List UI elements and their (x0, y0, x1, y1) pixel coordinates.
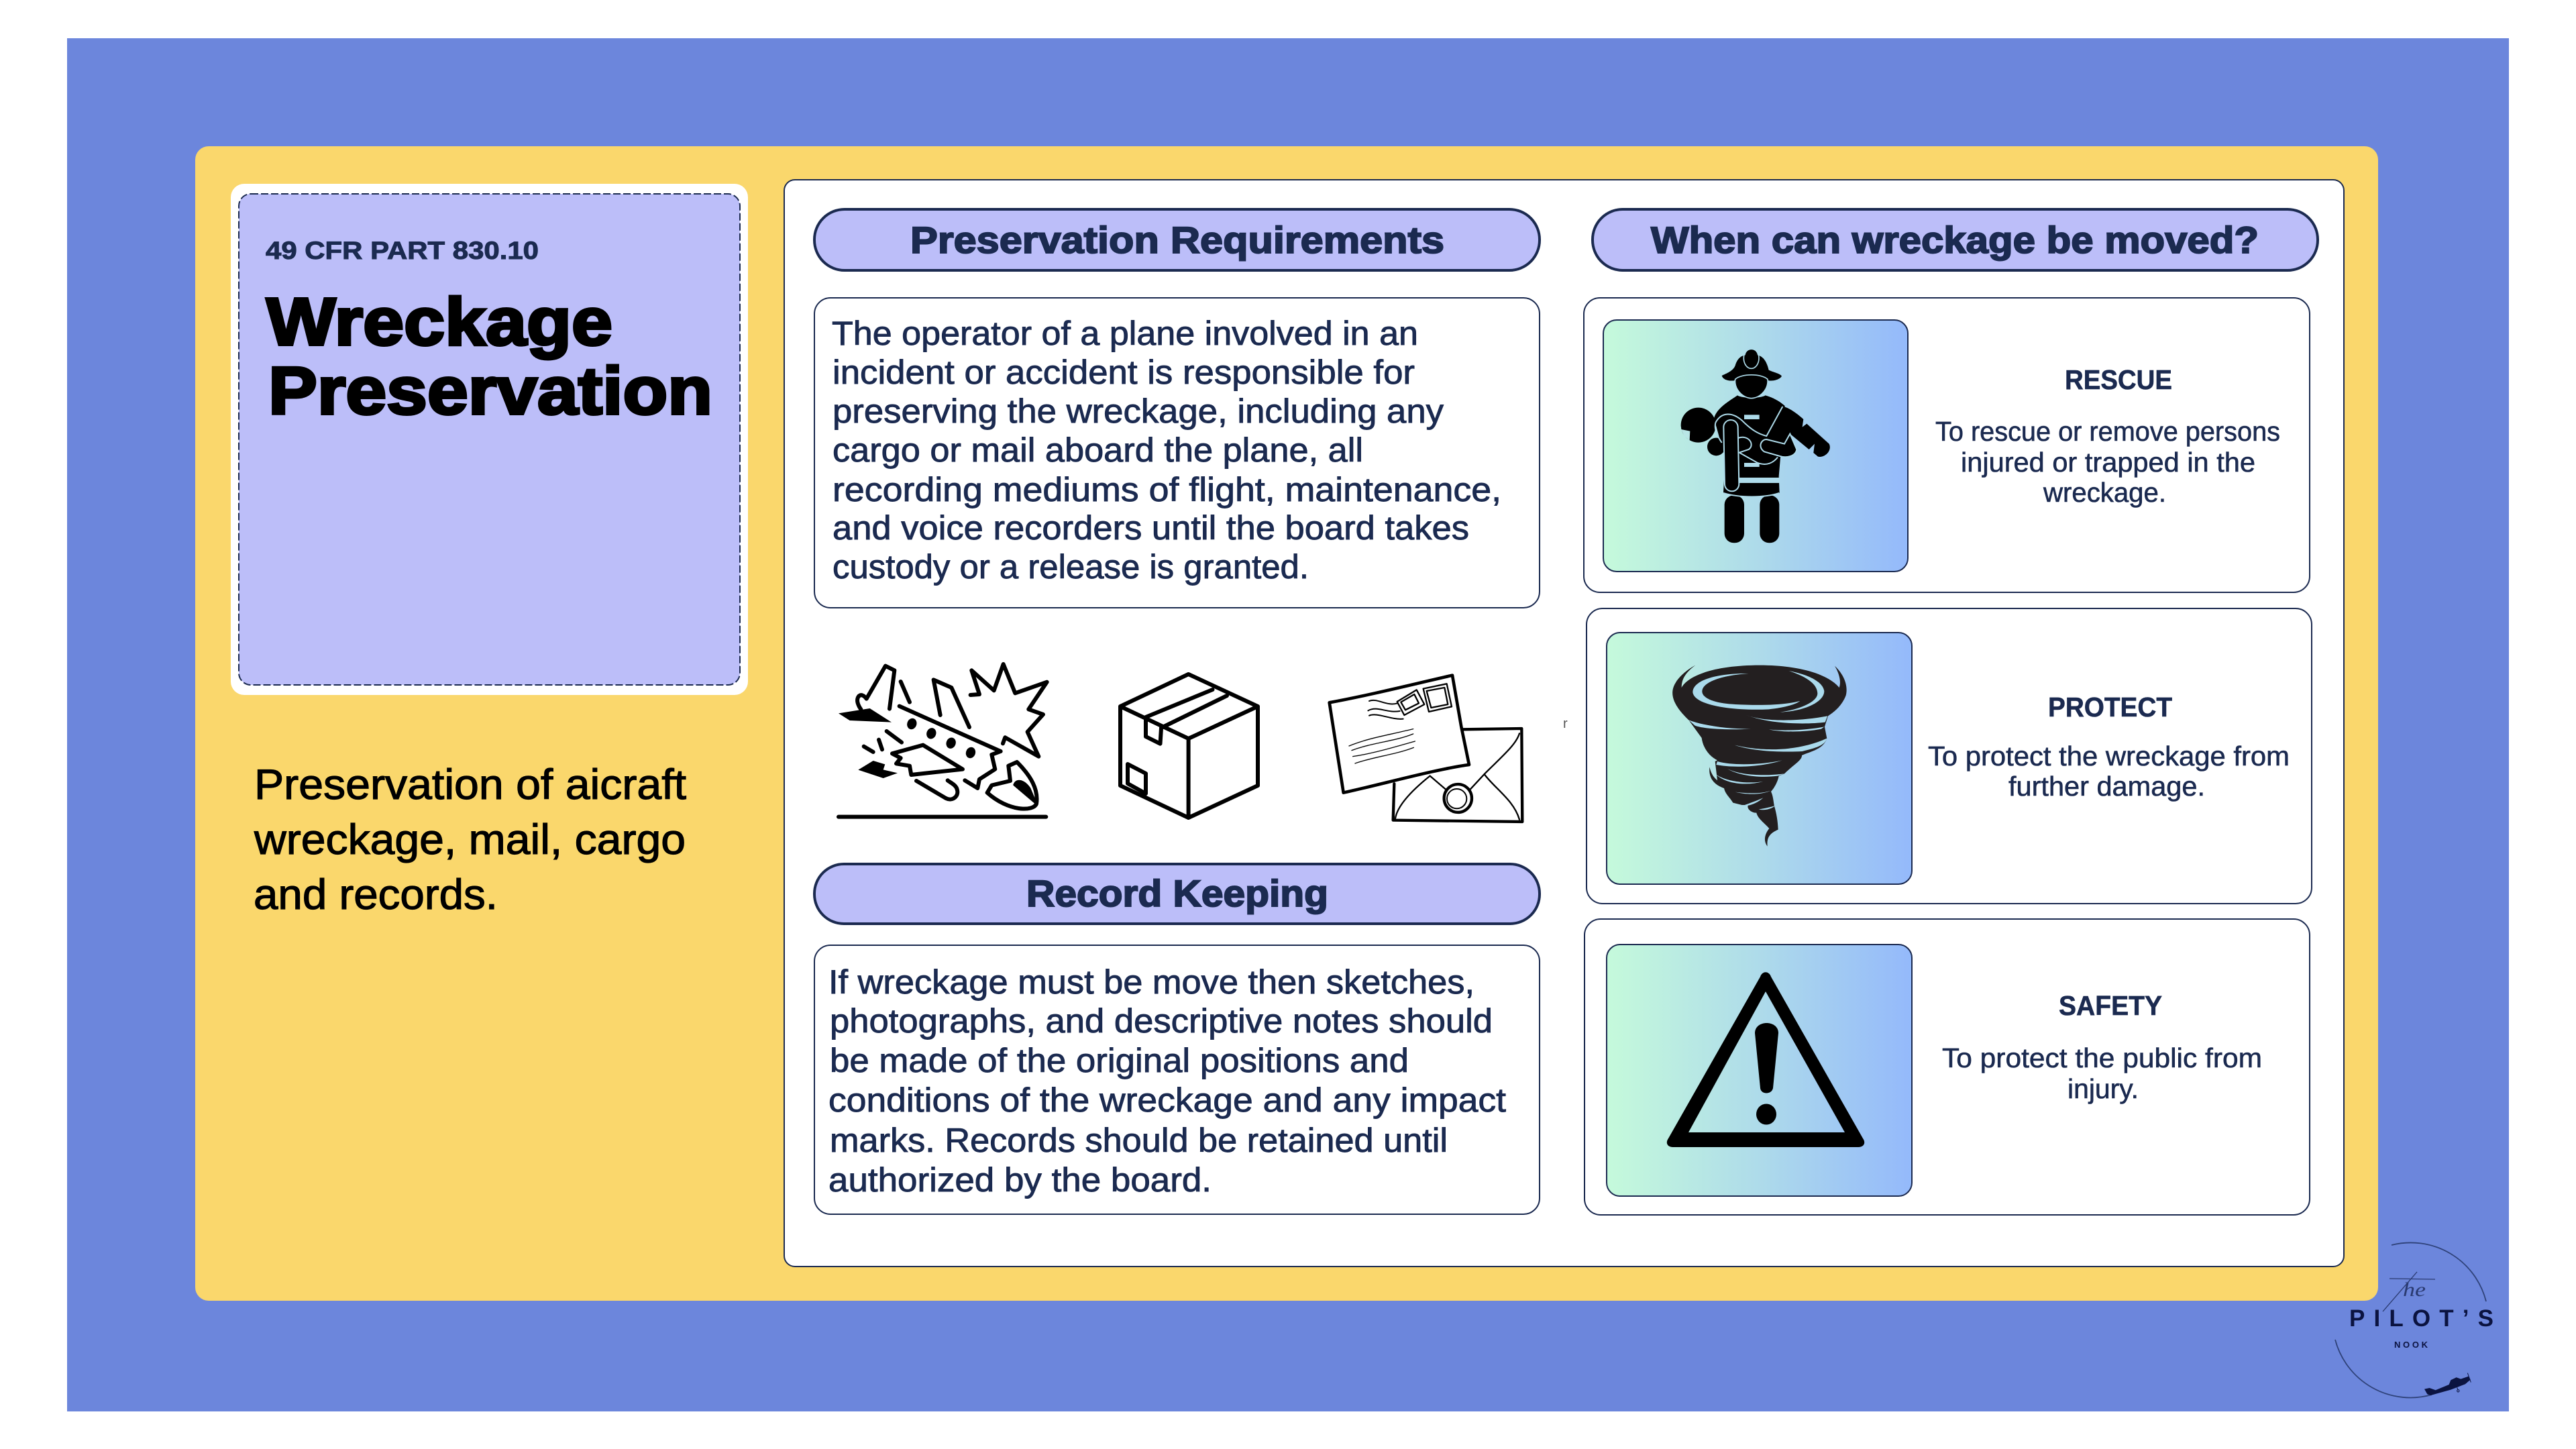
description: safety: injury. (2068, 1073, 2139, 1104)
text block: operator responsibility: custody or a release is granted. (833, 548, 1309, 586)
title: Preservation (268, 354, 712, 429)
text block: operator responsibility: recording mediums of flight, maintenance, (833, 471, 1501, 508)
heading: Record Keeping (814, 864, 1540, 924)
summary text: wreckage, mail, cargo (254, 816, 686, 863)
description: protect (1928, 741, 2290, 802)
text block: operator responsibility: The operator of a plane involved in an (832, 315, 1418, 352)
icon: plane crash (839, 664, 1047, 817)
icon: cardboard box (1120, 674, 1258, 818)
text block: operator responsibility (814, 298, 1540, 608)
description: safety: To protect the public from (1942, 1042, 2262, 1073)
icon: firefighter carrying person (1681, 348, 1830, 543)
description: rescue: To rescue or remove persons (1935, 416, 2280, 447)
logo: The Pilot's Nook: NOOK (2394, 1340, 2428, 1350)
summary text: Preservation of aicraft (254, 761, 687, 808)
heading: Preservation Requirements (814, 209, 1540, 270)
panel: safety (1585, 919, 2310, 1215)
text block: record keeping: photographs, and descriptive notes should (830, 1002, 1493, 1040)
panel: title card (231, 184, 748, 695)
summary text: and records. (254, 871, 498, 918)
icon: warning triangle (1667, 972, 1864, 1147)
text block: record keeping: conditions of the wreckage and any impact (828, 1081, 1506, 1119)
description: rescue (1935, 416, 2280, 508)
panel: rescue (1584, 298, 2310, 592)
panel: main content (784, 180, 2344, 1267)
logo: The Pilot's Nook: PILOT’S (2349, 1305, 2493, 1332)
heading: When can wreckage be moved? (1593, 209, 2318, 270)
text block: record keeping: authorized by the board. (828, 1161, 1212, 1199)
heading: Preservation Requirements: Preservation Requirements (910, 219, 1444, 261)
panel: yellow board (195, 146, 2378, 1301)
text block: operator responsibility: incident or accident is responsible for (833, 354, 1415, 391)
icon: small plane (2424, 1373, 2471, 1395)
summary text (254, 761, 687, 918)
label: safety: SAFETY (2059, 990, 2162, 1021)
description: protect: To protect the wreckage from (1928, 741, 2290, 771)
text block: record keeping: be made of the original positions and (830, 1042, 1409, 1079)
text block: operator responsibility: cargo or mail aboard the plane, all (833, 431, 1363, 469)
heading: When can wreckage be moved?: When can wreckage be moved? (1651, 219, 2259, 261)
logo: The Pilot's Nook (2335, 1242, 2493, 1397)
description: protect: further damage. (2008, 771, 2205, 802)
description: rescue: wreckage. (2043, 477, 2166, 508)
text block: operator responsibility: and voice recorders until the board takes (833, 509, 1469, 547)
label: protect: PROTECT (2048, 692, 2172, 722)
regulation reference: 49 CFR PART 830.10 (266, 237, 539, 264)
stray character: r (1563, 716, 1568, 731)
description: safety (1942, 1042, 2262, 1104)
description: rescue: injured or trapped in the (1961, 447, 2255, 478)
text block: operator responsibility: preserving the wreckage, including any (833, 392, 1444, 430)
heading: Record Keeping: Record Keeping (1026, 872, 1328, 914)
panel: protect (1587, 608, 2312, 904)
label: rescue: RESCUE (2065, 364, 2172, 395)
text block: record keeping (814, 945, 1540, 1214)
text block: record keeping: If wreckage must be move then sketches, (828, 963, 1474, 1001)
icon: mail envelopes (1330, 676, 1522, 822)
title: Wreckage (266, 284, 612, 360)
text block: record keeping: marks. Records should be retained until (830, 1122, 1448, 1159)
logo: The Pilot's Nook: he (2403, 1279, 2426, 1301)
title (266, 284, 712, 429)
icon: tornado (1672, 665, 1847, 847)
